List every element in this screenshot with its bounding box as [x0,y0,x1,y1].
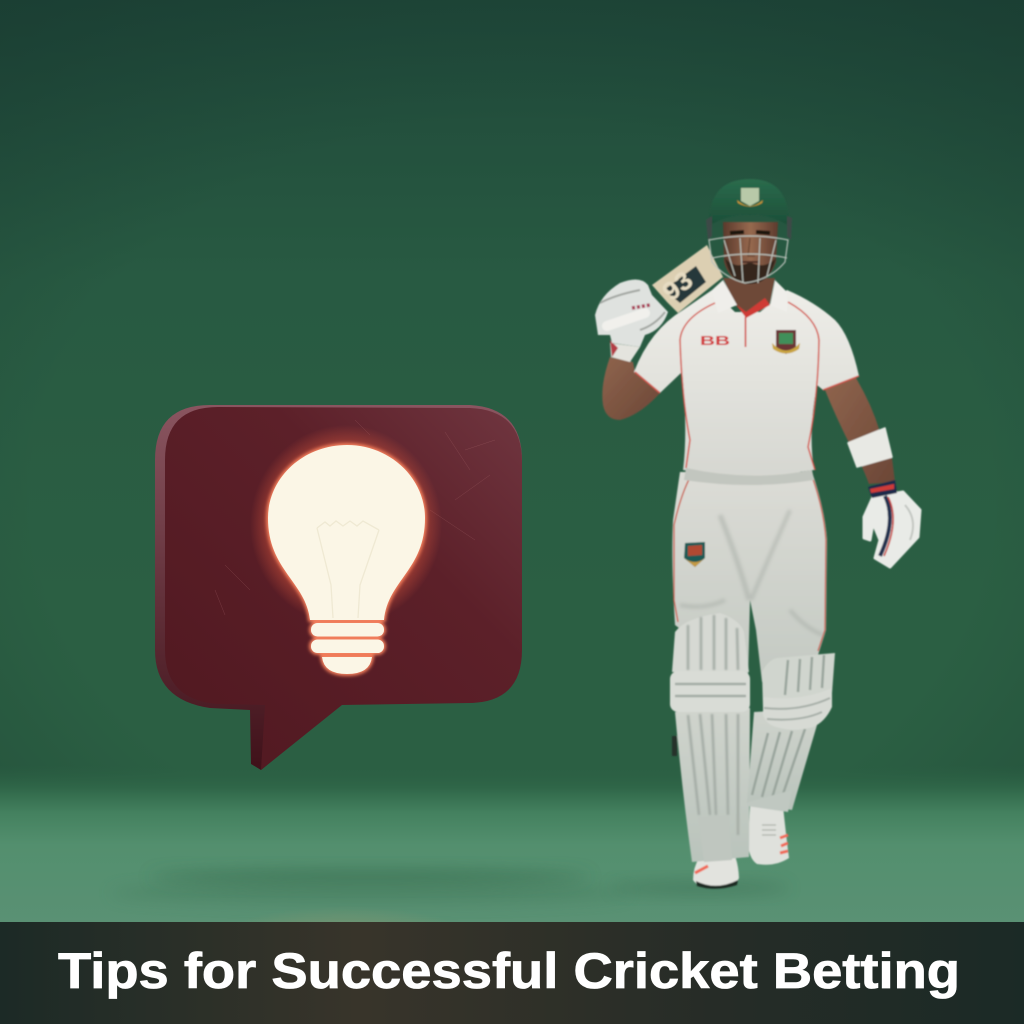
bulb glow [250,425,442,625]
eyes and nose [730,232,770,262]
left leg pad [670,613,750,862]
bubble scratches [215,420,495,615]
right shoe [748,806,789,865]
helmet grill [709,236,788,283]
wristband [848,428,892,467]
face [723,222,778,284]
bat [652,245,723,313]
left shoe [693,844,739,889]
cricket player [595,179,920,889]
beard [725,258,776,284]
right arm [825,378,895,484]
speech bubble with light bulb [155,405,522,770]
floor [0,765,1024,963]
neck [723,278,775,317]
helmet dome [709,179,789,226]
trousers [672,472,827,682]
shirt [634,290,859,485]
collar [712,280,787,347]
shirt badge [772,330,800,354]
left arm [602,357,660,420]
light bulb icon [268,445,425,674]
waistband [684,468,814,485]
shirt red piping [635,302,859,470]
head and helmet [706,179,792,284]
background wall [0,0,1024,800]
title banner [0,922,1024,1024]
bat: 93 [656,265,698,307]
helmet badge [737,188,763,206]
bulb filament [317,521,379,618]
glove on right hand [864,480,920,567]
right leg pad [747,653,835,812]
shoes [693,806,789,889]
bubble front face [165,407,522,770]
bubble 3D side [155,405,522,770]
trouser badge [684,542,705,567]
title text: Tips for Successful Cricket Betting [58,943,960,999]
shirt logo: BB [700,333,730,348]
left hand glove [595,279,668,362]
